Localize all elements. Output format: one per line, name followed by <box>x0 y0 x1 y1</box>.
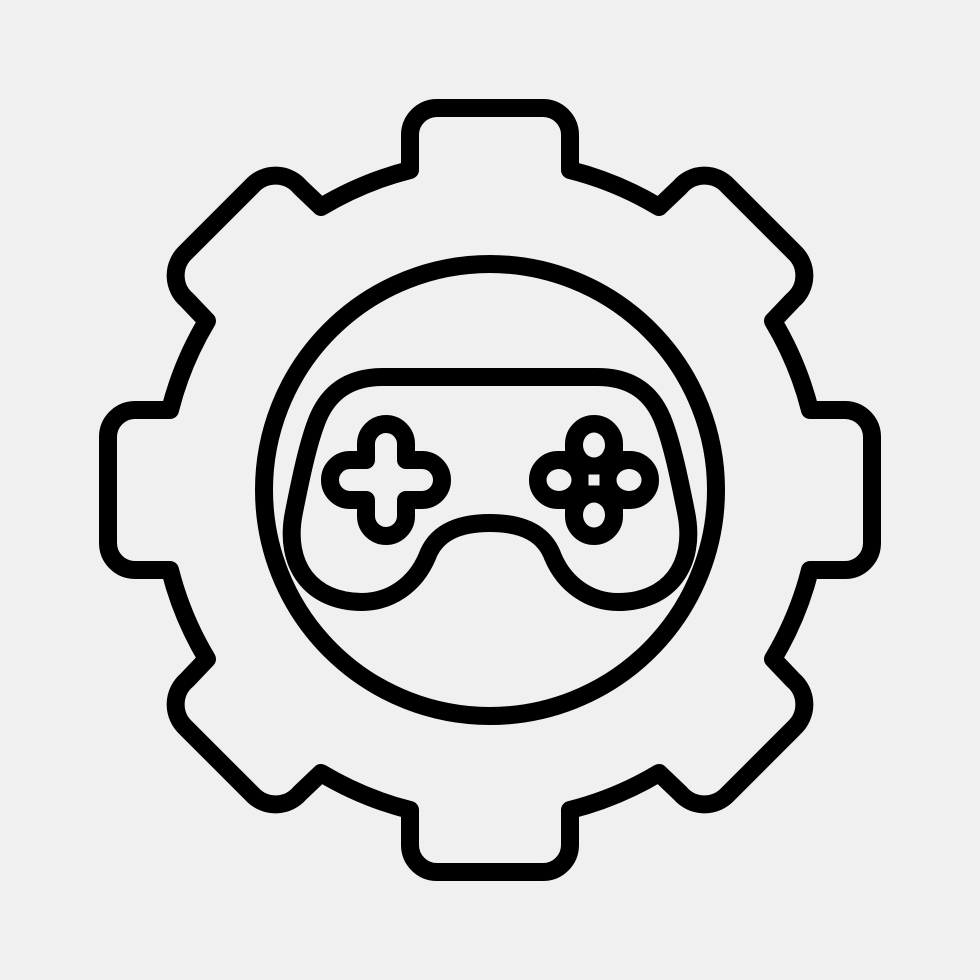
inner circle <box>264 264 716 716</box>
controller body <box>292 377 688 602</box>
d-pad <box>330 424 442 536</box>
icon: game controller <box>292 377 688 602</box>
action buttons <box>538 424 650 536</box>
icon: gear outline <box>108 108 872 872</box>
